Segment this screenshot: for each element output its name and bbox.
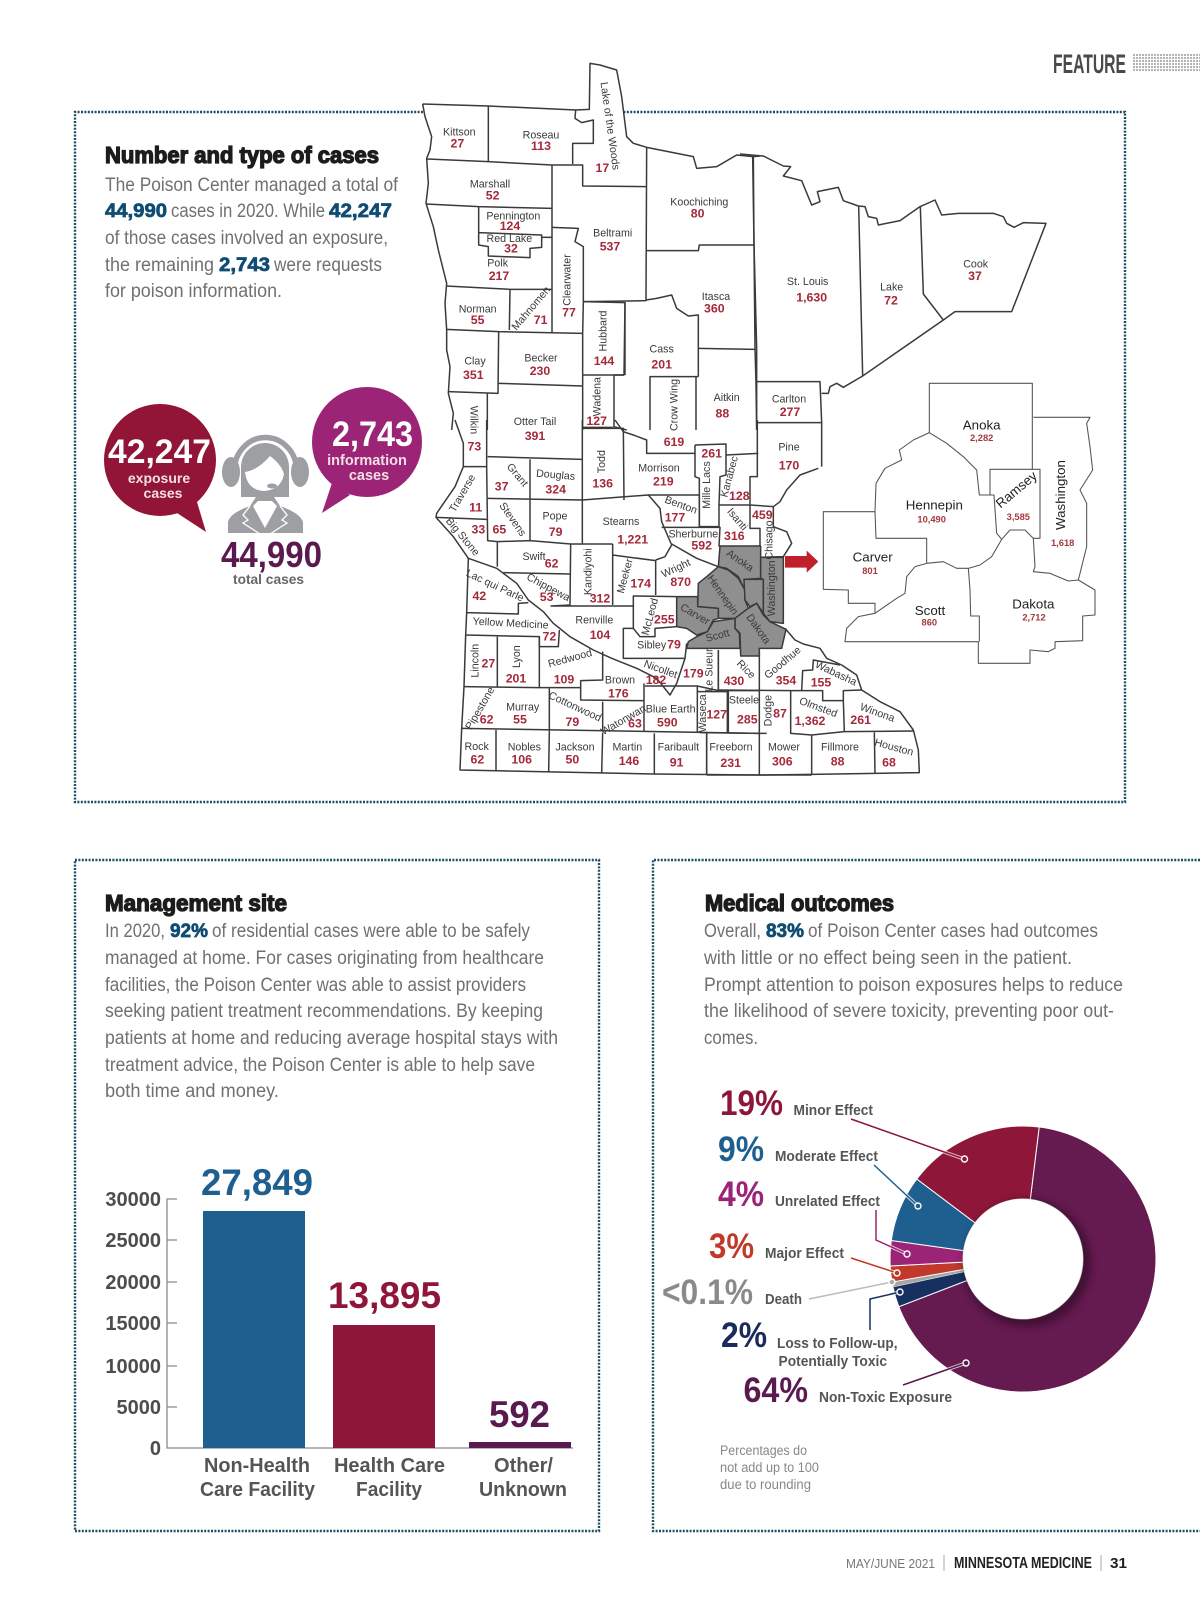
map region: southeast counties: Steele: [729, 694, 759, 706]
footer: issue, publication, page number: 31: [1110, 1555, 1127, 1572]
callout: exposure cases bubble: [104, 404, 216, 532]
text block: management site: patients at home and reducing average hospital stays with: [105, 1028, 558, 1049]
map region: southeast counties: Winona: [858, 701, 896, 725]
map region: southeast counties: 87: [773, 707, 787, 721]
map inset: Twin Cities metro counties: 10,490: [917, 514, 946, 524]
map region: southeast counties: Fillmore: [821, 742, 859, 754]
map region: northwest counties: [423, 63, 760, 434]
text block: management site: of residential cases were able to be safely: [212, 921, 530, 942]
map region: central and southern counties: Todd: [596, 450, 608, 473]
map region: central and southern counties: Grant: [504, 461, 530, 489]
map region: central and southern counties: Kandiyohi: [583, 548, 595, 595]
map region: central and southern counties: Meeker: [615, 557, 636, 595]
inner shadow around hole: [963, 1199, 1091, 1327]
map region: northwest counties: Crow Wing: [668, 379, 680, 431]
map region: central and southern counties: Swift: [522, 551, 546, 563]
map region: central and southern counties: Isanti: [724, 506, 750, 533]
donut chart: medical outcomes: [890, 1126, 1156, 1392]
map region: northwest counties: Norman: [459, 304, 497, 316]
map region: central and southern counties: 11: [469, 501, 482, 515]
map region: northwest counties: 124: [500, 219, 520, 233]
legend: loss to follow-up: Loss to Follow-up,: [777, 1336, 898, 1352]
map region: central and southern counties: 72: [542, 630, 556, 644]
map region: central and southern counties: Anoka: [724, 547, 756, 575]
map region: central and southern counties: Lincoln: [469, 644, 481, 678]
map inset: Twin Cities metro counties: Carver: [853, 550, 893, 565]
map region: northeast counties: 72: [884, 293, 898, 307]
bar: other or unknown: 592: [489, 1394, 550, 1435]
slice: unrelated effect 4%: [890, 1240, 964, 1266]
legend: loss to follow-up: Potentially Toxic: [778, 1354, 887, 1370]
map region: northwest counties: Pennington: [486, 210, 540, 222]
map region: central and southern counties: Sibley: [637, 639, 667, 651]
map region: central and southern counties: Big Stone: [443, 515, 482, 558]
icon: call center agent: [222, 437, 309, 534]
map region: central and southern counties: Faribault: [658, 742, 699, 754]
map region: northwest counties: Beltrami: [593, 228, 632, 240]
text block: medical outcomes: comes.: [704, 1028, 758, 1049]
text block: number of cases: the remaining: [105, 255, 214, 276]
text block: number of cases: for poison information.: [105, 281, 282, 302]
map region: northwest counties: Aitkin: [714, 392, 740, 404]
callout: information cases bubble: information: [327, 453, 407, 469]
map region: southeast counties: Dodge: [763, 695, 775, 726]
slice: major effect 3%: [890, 1262, 964, 1282]
slice: minor effect 19%: [917, 1126, 1039, 1223]
map region: central and southern counties: Cottonwood: [547, 690, 603, 724]
map region: northeast counties: 277: [780, 405, 800, 419]
map region: central and southern counties: Chippewa: [524, 571, 572, 604]
map region: central and southern counties: 619: [664, 435, 684, 449]
map inset: Twin Cities metro counties: 3,585: [1007, 512, 1030, 522]
map region: central and southern counties: Nobles: [508, 742, 541, 754]
map region: central and southern counties: Wright: [660, 557, 693, 581]
map region: central and southern counties: Martin: [613, 742, 642, 754]
legend: death: <0.1%: [662, 1273, 753, 1312]
bar: health care facility: Facility: [356, 1479, 423, 1501]
map inset: Twin Cities metro counties: 860: [922, 618, 937, 628]
panel: number and type of cases border: [75, 112, 1125, 802]
map region: central and southern counties: Dakota: [743, 612, 773, 647]
heading: number and type of cases: Number and type of cases: [105, 142, 379, 168]
footer: issue, publication, page number: MINNESOTA MEDICINE: [954, 1555, 1092, 1572]
text block: management site: seeking patient treatment recommendations. By keeping: [105, 1001, 543, 1022]
text block: number of cases: of those cases involved an exposure,: [105, 228, 388, 249]
text block: number of cases: 42,247: [329, 201, 392, 222]
map region: central and southern counties: Redwood: [547, 647, 593, 670]
bar: health care facility: [328, 1275, 445, 1501]
text block: number of cases: 44,990: [105, 201, 167, 222]
map region: central and southern counties: 50: [565, 752, 579, 766]
legend: unrelated effect: 4%: [718, 1175, 764, 1214]
map region: central and southern counties: Scott: [704, 627, 731, 645]
map region: central and southern counties: Benton: [663, 494, 699, 517]
bar chart: cases by management site: 30000: [105, 1189, 161, 1211]
map region: northeast counties: 1,630: [796, 291, 827, 305]
text block: medical outcomes: Overall,: [704, 921, 761, 942]
map region: central and southern counties: Lyon: [511, 645, 523, 668]
map region: northwest counties: 127: [586, 414, 607, 428]
legend: major effect: 3%: [709, 1227, 754, 1266]
map region: central and southern counties: Rock: [465, 741, 489, 753]
legend: non-toxic exposure: 64%: [744, 1371, 808, 1410]
bar: other or unknown: [469, 1394, 571, 1501]
map region: central and southern counties: 53: [540, 590, 554, 604]
legend: moderate effect: 9%: [718, 1130, 764, 1169]
legend: unrelated effect: Unrelated Effect: [775, 1194, 880, 1210]
total cases figure: 44,990: [221, 534, 322, 575]
slice: death: [892, 1269, 964, 1287]
map region: central and southern counties: 62: [470, 752, 484, 766]
bar: non-health care facility: 27,849: [201, 1162, 313, 1203]
map region: central and southern counties: 176: [608, 687, 629, 701]
bar chart: cases by management site: 25000: [105, 1230, 161, 1252]
map region: central and southern counties: Hennepin: [704, 573, 740, 617]
map region: central and southern counties: Watonwan: [599, 703, 648, 738]
map region: central and southern counties: 146: [619, 754, 639, 768]
legend: major effect: Major Effect: [765, 1246, 844, 1262]
footnote: rounding: [720, 1443, 819, 1492]
map region: northwest counties: Mahnomen: [510, 284, 553, 333]
map region: central and southern counties: 219: [653, 475, 674, 489]
map region: northwest counties: Marshall: [470, 179, 510, 191]
map region: northeast counties: Lake: [880, 282, 903, 294]
text block: management site: both time and money.: [105, 1081, 279, 1102]
text block: management site: 92%: [170, 921, 208, 942]
map inset: Twin Cities metro counties: [823, 383, 1095, 663]
bar: non-health care facility: [200, 1162, 316, 1501]
bar chart: cases by management site: 15000: [105, 1313, 161, 1335]
bar: other or unknown: Unknown: [479, 1479, 567, 1501]
map region: southeast counties: Rice: [734, 658, 758, 681]
map region: northwest counties: Wilkin: [468, 406, 480, 434]
total cases figure: total cases: [233, 571, 304, 587]
legend: minor effect: [720, 1084, 968, 1162]
text block: medical outcomes: [703, 921, 1123, 1049]
text block: medical outcomes: 83%: [766, 921, 804, 942]
footnote: rounding: Percentages do: [720, 1443, 807, 1458]
map region: central and southern counties: 170: [779, 458, 799, 472]
text block: number of cases: The Poison Center managed a total of: [105, 175, 399, 196]
map region: northwest counties: 351: [463, 368, 484, 382]
map region: central and southern counties: 870: [670, 575, 691, 589]
map region: central and southern counties: Blue Earth: [646, 704, 696, 716]
slice: loss to follow-up 2%: [893, 1272, 967, 1307]
footnote: rounding: due to rounding: [720, 1477, 811, 1492]
map region: central and southern counties: Chisago: [764, 520, 776, 560]
map region: central and southern counties: Yellow Medicine: [472, 616, 549, 632]
map region: central and southern counties: Lac qui Parle: [464, 567, 526, 605]
map region: southeast counties: Wabasha: [813, 659, 859, 689]
map region: central and southern counties: 136: [592, 477, 613, 491]
map region: central and southern counties: 1,221: [617, 532, 648, 546]
map region: central and southern counties: 590: [657, 716, 678, 730]
map region: southeast counties: Freeborn: [709, 742, 753, 754]
map region: central and southern counties: 128: [729, 489, 750, 503]
map region: northwest counties: Clay: [464, 355, 486, 367]
heading: medical outcomes: Medical outcomes: [705, 890, 894, 916]
bar chart: cases by management site: [105, 1162, 573, 1501]
map region: central and southern counties: Brown: [605, 674, 635, 686]
map inset: Twin Cities metro counties: Hennepin: [906, 497, 963, 512]
map region: central and southern counties: 312: [590, 592, 610, 606]
map region: northeast counties: St. Louis: [787, 276, 828, 288]
map region: central and southern counties: 55: [513, 712, 527, 726]
map region: southeast counties: Houston: [873, 737, 915, 759]
map region: northwest counties: Itasca: [702, 291, 730, 303]
map region: northeast counties: [740, 154, 1046, 467]
map region: northwest counties: Koochiching: [670, 197, 728, 209]
map region: central and southern counties: 62: [545, 556, 559, 570]
map region: central and southern counties: 179: [683, 666, 704, 680]
map region: central and southern counties: 261: [701, 447, 722, 461]
text block: medical outcomes: with little or no effect being seen in the patient.: [703, 948, 1072, 969]
map region: central and southern counties: 62: [480, 712, 494, 726]
map region: central and southern counties: Douglas: [536, 468, 576, 483]
text block: management site: treatment advice, the Poison Center is able to help save: [105, 1055, 535, 1076]
map region: northwest counties: Red Lake: [487, 233, 532, 245]
callout: exposure cases bubble: cases: [144, 485, 183, 501]
panel: management site border: [75, 860, 599, 1531]
text block: management site: managed at home. For cases originating from healthcare: [105, 948, 544, 969]
text block: management site: In 2020,: [105, 921, 165, 942]
text block: number of cases: [105, 175, 399, 302]
legend: minor effect: Minor Effect: [794, 1103, 873, 1119]
map region: northwest counties: Otter Tail: [514, 416, 556, 428]
map region: northwest counties: 52: [486, 188, 500, 202]
bar chart: cases by management site: 10000: [105, 1356, 161, 1378]
footer: issue, publication, page number: [846, 1555, 1127, 1572]
map region: central and southern counties: Mille Lacs: [701, 461, 713, 509]
bar: health care facility: Health Care: [334, 1455, 445, 1477]
text block: medical outcomes: Prompt attention to poison exposures helps to reduce: [704, 975, 1123, 996]
map inset: Twin Cities metro counties: Anoka: [963, 417, 1001, 432]
map inset: Twin Cities metro counties: 2,282: [970, 433, 993, 443]
map region: central and southern counties: 127: [706, 707, 727, 721]
callout: information cases bubble: [312, 387, 422, 513]
legend: major effect: [709, 1227, 900, 1276]
text block: number of cases: were requests: [273, 255, 382, 276]
map region: southeast counties: 88: [831, 754, 845, 768]
map region: northwest counties: 230: [530, 364, 550, 378]
map region: southeast counties: Goodhue: [762, 644, 804, 682]
map region: central and southern counties: 79: [667, 637, 681, 651]
map inset: Twin Cities metro counties: 801: [862, 566, 878, 576]
panel: medical outcomes border: [653, 860, 1200, 1531]
map region: central and southern counties: Jackson: [555, 742, 595, 754]
map region: central and southern counties: Murray: [506, 702, 540, 714]
donut hole: [963, 1199, 1083, 1319]
map region: central and southern counties: Pipestone: [463, 685, 497, 732]
map region: central and southern counties: 65: [492, 522, 506, 536]
map region: central and southern counties: 459: [752, 508, 773, 522]
map region: central and southern counties: 324: [545, 482, 566, 496]
map region: southeast counties: 231: [720, 756, 741, 770]
footer: issue, publication, page number: MAY/JUNE 2021: [846, 1556, 935, 1571]
feature header: FEATURE: [1053, 49, 1126, 79]
bar chart: cases by management site: 0: [150, 1438, 161, 1460]
legend: unrelated effect: [718, 1175, 910, 1257]
legend: non-toxic exposure: [744, 1360, 969, 1410]
bar: other or unknown: Other/: [494, 1455, 553, 1477]
text block: management site: [105, 921, 558, 1102]
callout: information cases bubble: cases: [349, 468, 389, 484]
map region: northeast counties: 37: [968, 269, 982, 283]
map region: southeast counties: 261: [850, 713, 871, 727]
map region: southeast counties: Mower: [768, 742, 800, 754]
legend: moderate effect: [718, 1130, 921, 1209]
map region: central and southern counties: 177: [665, 511, 685, 525]
callout: exposure cases bubble: 42,247: [108, 433, 211, 471]
map region: central and southern counties: [436, 420, 818, 775]
text block: medical outcomes: of Poison Center cases had outcomes: [808, 921, 1098, 942]
map region: central and southern counties: Pine: [778, 442, 800, 454]
map region: central and southern counties: Washington: [766, 560, 778, 616]
map region: southeast counties: 285: [737, 712, 758, 726]
map region: northwest counties: 113: [531, 139, 551, 153]
metro counties shaded: [677, 546, 786, 656]
bar: non-health care facility: Care Facility: [200, 1479, 316, 1501]
map region: central and southern counties: 37: [495, 480, 509, 494]
map region: northwest counties: 360: [704, 302, 725, 316]
map region: northwest counties: 77: [562, 306, 576, 320]
legend: death: Death: [765, 1292, 802, 1308]
footnote: rounding: not add up to 100: [720, 1460, 819, 1475]
map region: northwest counties: 201: [651, 357, 672, 371]
map region: central and southern counties: 79: [565, 715, 579, 729]
callout: exposure cases bubble: exposure: [128, 470, 190, 486]
map region: central and southern counties: 182: [646, 673, 666, 687]
map region: central and southern counties: 91: [670, 756, 684, 770]
map region: northwest counties: 88: [715, 406, 729, 420]
map region: central and southern counties: Kanabec: [718, 454, 741, 499]
map region: northwest counties: 17: [595, 161, 609, 175]
map region: northwest counties: 80: [691, 207, 705, 221]
bar: non-health care facility: Non-Health: [204, 1455, 310, 1477]
map region: northeast counties: Cook: [963, 258, 989, 270]
map region: central and southern counties: Morrison: [638, 463, 680, 475]
map region: central and southern counties: Stevens: [496, 500, 528, 539]
map inset: Twin Cities metro counties: 2,712: [1022, 613, 1046, 623]
map region: southeast counties: 1,362: [795, 714, 826, 728]
map region: northwest counties: Cass: [650, 343, 674, 355]
map region: central and southern counties: 104: [590, 628, 610, 642]
legend: non-toxic exposure: Non-Toxic Exposure: [819, 1390, 952, 1406]
bar: health care facility: 13,895: [328, 1275, 441, 1316]
map region: central and southern counties: 33: [471, 522, 485, 536]
map region: central and southern counties: 201: [506, 672, 526, 686]
map region: northwest counties: 144: [594, 354, 614, 368]
arrow: to metro inset: [785, 551, 818, 573]
map inset: Twin Cities metro counties: Dakota: [1012, 596, 1055, 611]
map inset: Twin Cities metro counties: Scott: [915, 603, 945, 618]
map region: central and southern counties: Nicollet: [642, 658, 679, 681]
map region: central and southern counties: 255: [654, 612, 675, 626]
text block: number of cases: 2,743: [219, 255, 270, 276]
map region: southeast counties: [700, 628, 919, 775]
slice: non-toxic exposure 64%: [899, 1127, 1156, 1392]
map region: northwest counties: Clearwater: [562, 254, 574, 306]
text block: management site: facilities, the Poison Center was able to assist providers: [105, 975, 526, 996]
map inset: Twin Cities metro counties: Washington: [1053, 460, 1068, 530]
map region: southeast counties: Olmsted: [798, 695, 839, 720]
map region: central and southern counties: Le Sueur: [704, 648, 716, 692]
map region: northwest counties: Wadena: [592, 377, 604, 416]
text block: medical outcomes: the likelihood of severe toxicity, preventing poor out-: [704, 1001, 1114, 1022]
map inset: Twin Cities metro counties: Ramsey: [993, 468, 1040, 511]
bar chart: cases by management site: 5000: [116, 1397, 161, 1419]
map region: northwest counties: Becker: [524, 353, 558, 365]
map region: central and southern counties: McLeod: [640, 597, 661, 637]
map region: central and southern counties: 79: [549, 525, 563, 539]
map region: northwest counties: Roseau: [523, 130, 559, 142]
map region: northwest counties: Polk: [487, 258, 509, 270]
map region: central and southern counties: 27: [481, 657, 495, 671]
map region: central and southern counties: 73: [467, 440, 481, 454]
slice: moderate effect 9%: [891, 1179, 975, 1251]
map region: central and southern counties: Sherburne: [668, 528, 718, 540]
map region: northwest counties: Lake of the Woods: [598, 81, 622, 171]
callout: information cases bubble: 2,743: [332, 415, 413, 454]
map: Minnesota counties with case counts: [423, 63, 1046, 775]
map region: southeast counties: 430: [724, 674, 744, 688]
legend: death: [662, 1273, 895, 1312]
legend: minor effect: 19%: [720, 1084, 783, 1123]
map region: northwest counties: Hubbard: [598, 310, 610, 351]
map region: central and southern counties: 592: [691, 538, 712, 552]
map region: northwest counties: 55: [471, 313, 485, 327]
legend: loss to follow-up: [721, 1289, 903, 1370]
map region: southeast counties: 155: [811, 676, 831, 690]
map region: central and southern counties: Stearns: [603, 516, 639, 528]
map region: central and southern counties: Traverse: [447, 472, 478, 515]
map region: central and southern counties: Renville: [575, 614, 613, 626]
map region: central and southern counties: 42: [472, 589, 486, 603]
map region: southeast counties: 68: [882, 755, 896, 769]
map region: southeast counties: 306: [772, 754, 793, 768]
map region: central and southern counties: 174: [630, 576, 651, 590]
legend: loss to follow-up: 2%: [721, 1316, 767, 1355]
map region: central and southern counties: 391: [525, 429, 545, 443]
map region: northeast counties: Carlton: [772, 394, 806, 406]
map region: central and southern counties: 316: [724, 529, 745, 543]
map region: central and southern counties: 106: [511, 752, 532, 766]
map region: central and southern counties: Carver: [678, 601, 712, 628]
map region: central and southern counties: Pope: [543, 510, 568, 522]
map region: northwest counties: 27: [450, 136, 464, 150]
map region: central and southern counties: Waseca: [697, 694, 709, 732]
map region: central and southern counties: 63: [628, 717, 642, 731]
map region: southeast counties: 354: [776, 673, 796, 687]
map region: central and southern counties: 109: [554, 672, 574, 686]
map region: northwest counties: 537: [600, 240, 620, 254]
map region: northwest counties: 71: [534, 313, 548, 327]
map inset: Twin Cities metro counties: 1,618: [1051, 538, 1074, 548]
bar chart: cases by management site: 20000: [105, 1272, 161, 1294]
legend: moderate effect: Moderate Effect: [775, 1149, 878, 1165]
heading: management site: Management site: [105, 890, 287, 916]
map region: northwest counties: Kittson: [443, 127, 476, 139]
map region: northwest counties: 32: [504, 242, 518, 256]
map region: northwest counties: 217: [489, 269, 509, 283]
text block: number of cases: cases in 2020. While: [171, 201, 325, 222]
